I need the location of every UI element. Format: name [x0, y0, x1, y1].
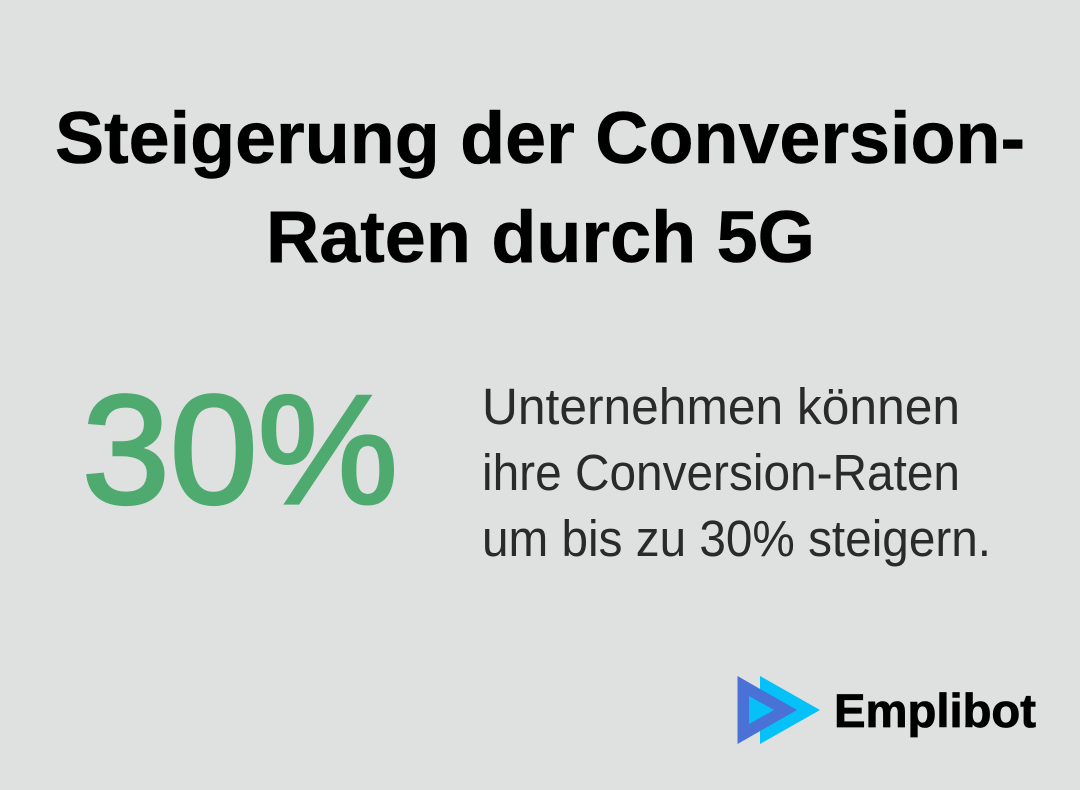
big statistic: 30%: 30% [82, 363, 398, 536]
icon: play triangles [738, 676, 820, 744]
logo: Emplibot [738, 676, 1036, 744]
title: Raten durch 5G [266, 197, 815, 278]
description text [482, 378, 991, 567]
logo wordmark: Emplibot [834, 684, 1036, 737]
title: Steigerung der Conversion- [55, 98, 1025, 179]
description text: ihre Conversion-Raten [482, 444, 960, 501]
description text: um bis zu 30% steigern. [482, 510, 991, 567]
description text: Unternehmen können [482, 378, 960, 435]
title [55, 98, 1025, 278]
